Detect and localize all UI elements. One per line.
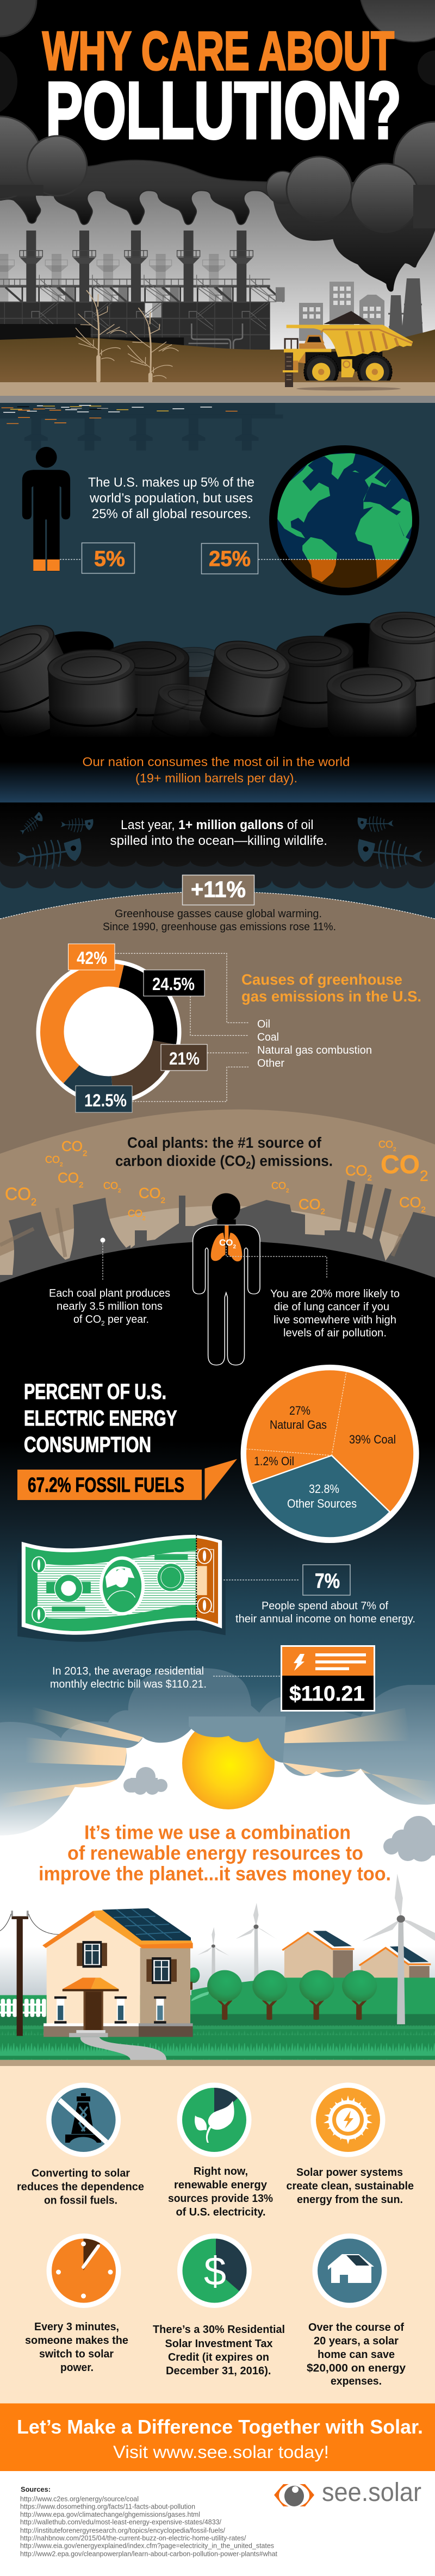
sources: http://nahbnow.com/2015/04/the-current-buzz-on-electric-home-utility-rates/: [20, 2534, 246, 2542]
heading: causes of greenhouse gas emissions: gas emissions in the U.S.: [241, 988, 421, 1005]
bare trees: [76, 290, 178, 398]
text: renewable energy 13%: renewable energy: [174, 2179, 268, 2191]
sources: http://instituteforenergyresearch.org/topics/encyclopedia/fossil-fuels/: [20, 2526, 225, 2535]
heading: renewable energy message: improve the planet...it saves money too.: [39, 1863, 391, 1884]
pie chart: [241, 1365, 419, 1543]
text: each coal plant: nearly 3.5 million tons: [57, 1301, 163, 1312]
icon: clock: [47, 2233, 121, 2308]
CO2 labels: CO: [103, 1180, 118, 1191]
text: lung cancer: live somewhere with high: [274, 1314, 396, 1326]
legend: [257, 1018, 372, 1069]
header scene: polluted factory landscape: [0, 0, 435, 403]
text: solar home savings: 20 years, a solar: [314, 2335, 399, 2347]
CO2 labels: 2: [79, 1180, 83, 1190]
label: CO2 in lungs: CO: [219, 1237, 233, 1248]
road: [0, 381, 435, 396]
panel: solar neighborhood scene: [0, 1874, 435, 2066]
stat: 25%: 25%: [209, 547, 251, 571]
factory reflection: [0, 403, 283, 451]
corner clouds: [0, 0, 435, 117]
foreground grass and path: [0, 2037, 435, 2066]
text: greenhouse gasses: Since 1990, greenhouse gas emissions rose 11%.: [103, 921, 336, 933]
pie chart: Natural Gas: [270, 1418, 327, 1432]
CO2 labels: 2: [60, 1162, 63, 1168]
factory silhouette: [0, 1180, 435, 1305]
panel: oil barrels: [0, 610, 435, 802]
icon: plant: [177, 2082, 251, 2157]
stat: 7%: [303, 1565, 350, 1595]
panel: solar benefits: [0, 2066, 435, 2404]
CO2 labels: 2: [393, 1147, 396, 1153]
icon: sun energy: [311, 2082, 385, 2157]
text: population vs resources: The U.S. makes up 5% of the: [88, 475, 254, 490]
text: home energy income: People spend about 7% of: [262, 1600, 388, 1612]
icon: person with lungs: [193, 1193, 260, 1365]
small solar houses: [282, 1931, 431, 1977]
label: 42%: 42%: [77, 948, 107, 968]
icon: electric bill card: [281, 1645, 375, 1712]
CO2 labels: CO: [399, 1194, 421, 1210]
CO2 labels: CO: [61, 1138, 83, 1154]
text: converting to solar: on fossil fuels.: [44, 2194, 117, 2206]
stat: 5%: 5%: [94, 547, 125, 571]
text: tax credit: [153, 2324, 285, 2377]
heading: percent of U.S. electric energy consumption: PERCENT OF U.S.: [24, 1380, 166, 1404]
CO2 labels: 2: [421, 1205, 426, 1215]
label: 12.5%: 12.5%: [84, 1091, 127, 1110]
label: 12.5%: [76, 1086, 132, 1112]
heading: renewable energy message: [39, 1821, 391, 1884]
banner: call to action: [0, 2403, 435, 2471]
text: solar power systems: create clean, sustainable: [286, 2180, 414, 2192]
icon: globe: [269, 445, 424, 598]
icon: dollar tax credit: $: [204, 2249, 226, 2294]
text: tax credit: Credit (it expires on: [168, 2351, 269, 2363]
stat: +11%: [183, 875, 254, 905]
text: population vs resources: world’s population, but uses: [89, 491, 253, 506]
text: tax credit: There’s a 30% Residential: [153, 2324, 285, 2336]
legend: Coal: [257, 1031, 279, 1043]
sources: http://www.eia.gov/energyexplained/index.cfm?page=electricity_in_the_united_states: [20, 2541, 274, 2550]
label: 21%: 21%: [169, 1049, 200, 1068]
icon: trees: [188, 1968, 377, 2020]
heading: coal plants: [115, 1134, 333, 1171]
CO2 labels: CO: [5, 1184, 31, 1204]
heading: percent of U.S. electric energy consumption: [24, 1380, 177, 1457]
heading: coal plants: carbon dioxide (CO: [115, 1153, 256, 1169]
CO2 labels: 2: [118, 1188, 121, 1194]
sources: http://www.c2es.org/energy/source/coal: [20, 2494, 139, 2503]
icon: main house: [42, 1908, 193, 2037]
right smoke column: [266, 122, 435, 292]
text: lung cancer: die of lung cancer if you: [274, 1301, 389, 1313]
pie chart: 1.2% Oil: [254, 1454, 294, 1468]
CO2 labels: CO: [345, 1162, 368, 1179]
label: 21%: [161, 1044, 207, 1071]
CO2 labels: 2: [31, 1197, 36, 1208]
panel: coal plants: [0, 1110, 435, 1468]
text: renewable energy 13%: Right now,: [194, 2166, 248, 2177]
text: tax credit: Solar Investment Tax: [165, 2338, 273, 2350]
text: renewable energy 13%: [168, 2166, 273, 2218]
text: population vs resources: [88, 475, 254, 521]
stat: 7%: 7%: [315, 1570, 340, 1593]
sources: https://www.dosomething.org/facts/11-facts-about-pollution: [20, 2502, 195, 2511]
CO2 labels: CO: [381, 1150, 420, 1179]
text: every 3 minutes: Every 3 minutes,: [34, 2321, 119, 2333]
heading: percent of U.S. electric energy consumption: ELECTRIC ENERGY: [24, 1407, 177, 1430]
lower windows: [54, 1996, 166, 2024]
CO2 labels: CO: [128, 1208, 142, 1219]
text: every 3 minutes: power.: [60, 2362, 94, 2374]
heading: causes of greenhouse gas emissions: [241, 971, 421, 1005]
text: converting to solar: [17, 2167, 144, 2206]
callout: electric bill text: In 2013, the average residential: [52, 1665, 204, 1677]
CO2 labels: 2: [321, 1207, 325, 1216]
sources: Sources:: [21, 2485, 51, 2493]
smoke band with drips: [0, 143, 275, 225]
CO2 labels: CO: [58, 1169, 79, 1186]
panel: ocean spill: [0, 802, 435, 928]
stat: 25%: [201, 544, 258, 574]
connector lines: [115, 954, 248, 1102]
text: every 3 minutes: switch to solar: [39, 2348, 114, 2360]
stat: 5%: [82, 543, 135, 573]
text: solar power systems: [286, 2167, 414, 2206]
text: each coal plant: 2: [101, 1320, 105, 1327]
text: solar home savings: [307, 2322, 406, 2387]
sources: http://wallethub.com/edu/most-least-energy-expensive-states/4833/: [20, 2518, 221, 2526]
callout: fossil fuels: 67.2% FOSSIL FUELS: [28, 1474, 184, 1497]
text: converting to solar: reduces the dependence: [17, 2181, 144, 2193]
icon: no oil derrick: [46, 2082, 121, 2157]
icon: small clouds: [123, 1767, 435, 1862]
callout: electric bill text: [50, 1665, 207, 1690]
pie chart: 32.8%: [309, 1482, 339, 1496]
title: [42, 21, 401, 155]
background city skyline: [299, 278, 423, 341]
utility pole: [0, 1911, 60, 2036]
factory: [0, 231, 285, 350]
porch and door: [63, 1977, 119, 2037]
text: each coal plant: Each coal plant produces: [49, 1287, 170, 1299]
mining truck: [283, 311, 413, 390]
text: oil spill: [110, 818, 327, 848]
CO2 labels: 2: [420, 1167, 428, 1184]
text: population vs resources: 25% of all global resources.: [92, 507, 251, 521]
text: solar home savings: home can save: [318, 2349, 395, 2361]
text: tax credit: December 31, 2016).: [166, 2365, 271, 2377]
text: each coal plant: per year.: [105, 1314, 149, 1326]
heading: renewable energy message: of renewable energy resources to: [67, 1842, 363, 1864]
sources: [20, 2485, 277, 2558]
CO2 labels: 2: [83, 1149, 87, 1158]
logo: see.solar: see.solar: [322, 2478, 421, 2507]
CO2 labels: [5, 1138, 428, 1222]
text: every 3 minutes: someone makes the: [25, 2335, 128, 2347]
heading: percent of U.S. electric energy consumption: CONSUMPTION: [24, 1433, 151, 1457]
logo: see.solar: [274, 2478, 421, 2507]
icon: solar home: [312, 2233, 387, 2308]
text: oil spill: Last year, 1+ million gallons of oil: [121, 818, 313, 832]
text: solar power systems: energy from the sun.: [297, 2194, 403, 2206]
heading: renewable energy message: It’s time we use a combination: [84, 1821, 351, 1843]
text: oil consumption: [83, 755, 350, 785]
left cloud puffs: [0, 116, 87, 199]
pie chart: 39% Coal: [349, 1433, 396, 1446]
banner: call to action: Visit www.see.solar today!: [113, 2442, 329, 2462]
icon: foreground turbine: [362, 1874, 435, 2024]
CO2 labels: CO: [378, 1139, 393, 1150]
label: 24.5%: [144, 970, 204, 996]
text: renewable energy 13%: sources provide 13%: [168, 2193, 273, 2205]
text: home energy income: [235, 1600, 415, 1625]
icon: person: [22, 447, 70, 571]
text: every 3 minutes: [25, 2321, 128, 2374]
panel: electric energy consumption: [0, 1365, 435, 1903]
text: greenhouse gasses: Greenhouse gasses cause global warming.: [115, 908, 322, 920]
text: oil consumption: (19+ million barrels per day).: [135, 771, 297, 785]
panel: greenhouse gases: [0, 875, 435, 1196]
ground: [0, 329, 435, 382]
heading: causes of greenhouse gas emissions: Causes of greenhouse: [241, 971, 402, 988]
text: solar home savings: Over the course of: [308, 2322, 404, 2334]
text: lung cancer: [270, 1288, 400, 1339]
CO2 labels: 2: [286, 1188, 289, 1194]
CO2 labels: CO: [139, 1185, 161, 1202]
legend: Oil: [257, 1018, 270, 1030]
text: greenhouse gasses: [103, 908, 336, 933]
text: converting to solar: Converting to solar: [32, 2167, 130, 2179]
sun rays and clouds: [0, 1668, 435, 1903]
pie chart: 27%: [289, 1404, 310, 1417]
text: lung cancer: You are 20% more likely to: [270, 1288, 400, 1300]
text: oil spill: spilled into the ocean—killing wildlife.: [110, 833, 327, 848]
label: 42%: [69, 944, 115, 970]
banner: call to action: Let’s Make a Difference Together with Solar.: [17, 2416, 423, 2438]
pie chart: Other Sources: [287, 1497, 357, 1510]
sources: http://www2.epa.gov/cleanpowerplan/learn-about-carbon-pollution-power-plants#what: [20, 2550, 277, 2558]
icon: dollar bill: [17, 1535, 226, 1642]
CO2 labels: CO: [45, 1154, 60, 1165]
text: lung cancer: levels of air pollution.: [283, 1327, 387, 1339]
sources: http://www.epa.gov/climatechange/ghgemissions/gases.html: [20, 2510, 200, 2518]
heading: coal plants: ) emissions.: [251, 1153, 333, 1169]
CO2 labels: 2: [142, 1216, 146, 1222]
text: solar power systems: Solar power systems: [296, 2167, 403, 2179]
panel: water and resources: [0, 403, 435, 680]
icon: electric bill card: $110.21: [289, 1682, 365, 1706]
heading: coal plants: 2: [246, 1160, 251, 1171]
text: each coal plant: of CO: [73, 1314, 102, 1326]
label: CO2 in lungs: 2: [233, 1244, 236, 1250]
hills and ground: [0, 1977, 435, 2060]
callout: electric bill text: monthly electric bill was $110.21.: [50, 1678, 207, 1690]
CO2 labels: CO: [271, 1180, 286, 1191]
donut chart: [36, 959, 182, 1105]
text: solar home savings: $20,000 on energy: [307, 2362, 406, 2374]
callout: fossil fuels: [17, 1459, 237, 1500]
icon: dollar tax credit: [177, 2233, 252, 2308]
icon: wind turbines: [197, 1903, 277, 1981]
icon: sun: [182, 1717, 275, 1809]
oil streaks on water: [2, 406, 238, 424]
upper windows: [77, 1941, 177, 1984]
stat: +11%: +11%: [191, 876, 246, 902]
text: home energy income: their annual income on home energy.: [235, 1613, 415, 1625]
text: solar home savings: expenses.: [331, 2375, 382, 2387]
text: oil consumption: Our nation consumes the most oil in the world: [83, 755, 350, 769]
CO2 labels: 2: [161, 1196, 165, 1205]
heading: coal plants: Coal plants: the #1 source of: [127, 1134, 322, 1151]
icon: dead fish: [15, 811, 424, 874]
fence: [0, 1999, 46, 2017]
callout lines: [100, 1237, 327, 1280]
label: 24.5%: 24.5%: [152, 974, 195, 994]
legend: Other: [257, 1057, 284, 1069]
text: renewable energy 13%: of U.S. electricity.: [176, 2206, 265, 2218]
text: each coal plant: [49, 1287, 170, 1327]
CO2 labels: CO: [299, 1196, 321, 1212]
legend: Natural gas combustion: [257, 1044, 372, 1056]
CO2 labels: 2: [368, 1173, 372, 1183]
